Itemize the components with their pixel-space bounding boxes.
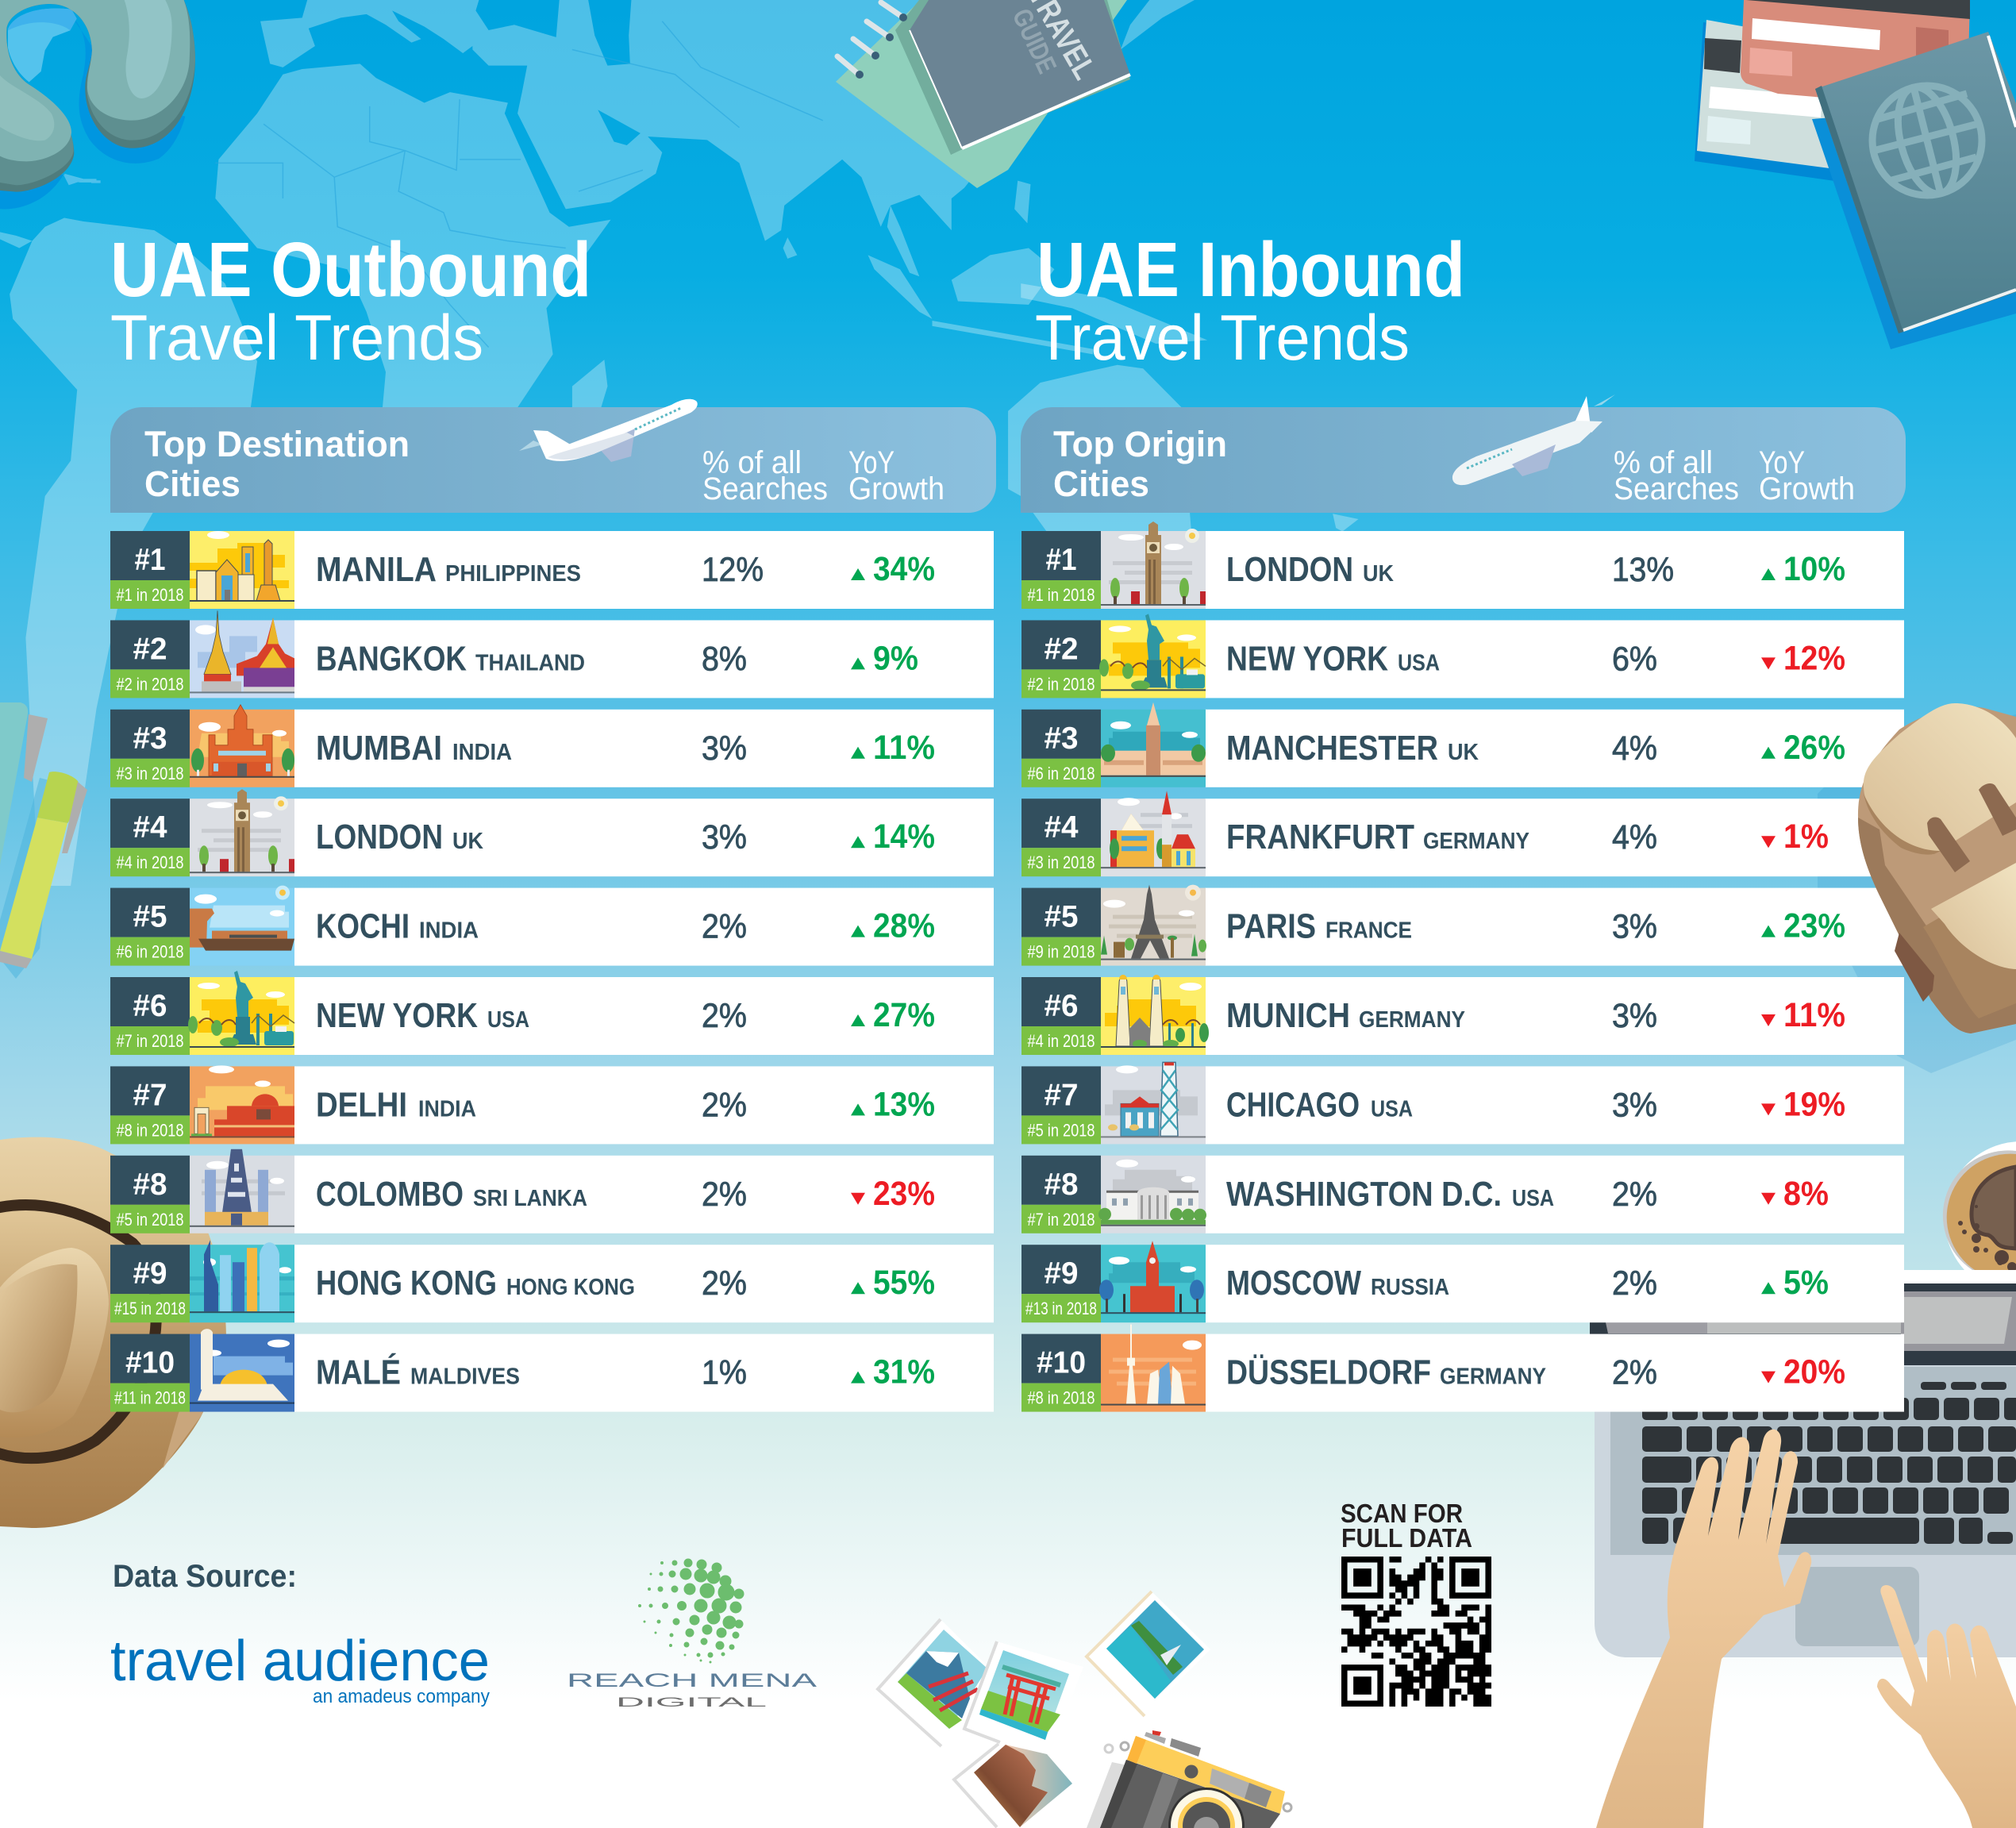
row: inbound 10 Dusseldorf: 2% — [1612, 1354, 1657, 1392]
row: inbound 2 New York: #2 — [1045, 632, 1078, 666]
row: inbound 10 Dusseldorf: GERMANY — [1440, 1364, 1546, 1390]
row: inbound 2 New York: USA — [1398, 650, 1440, 675]
panel: outbound table header: Searches — [702, 471, 828, 506]
row: outbound 1 Manila: 12% — [702, 551, 764, 589]
row: outbound 6 New York: #6 — [133, 989, 167, 1023]
callout: scan for full data: SCAN FOR — [1341, 1499, 1463, 1528]
row: outbound 8 Colombo: #5 in 2018 — [116, 1210, 184, 1230]
row: outbound 10 Male: MALDIVES — [410, 1364, 520, 1390]
row: outbound 7 Delhi: #8 in 2018 — [116, 1120, 184, 1140]
row: outbound 3 Mumbai: INDIA — [452, 740, 512, 765]
row: outbound 3 Mumbai — [110, 705, 994, 787]
icon: passport — [1812, 32, 2016, 349]
row: outbound 7 Delhi: 13% — [873, 1085, 935, 1123]
row: outbound 8 Colombo: 23% — [873, 1175, 935, 1213]
row: inbound 9 Moscow: MOSCOW — [1226, 1264, 1362, 1303]
callout: scan for full data: FULL DATA — [1341, 1523, 1472, 1553]
row: outbound 6 New York: USA — [487, 1007, 529, 1033]
icon: Mumbai skyline — [190, 705, 294, 787]
row: outbound 6 New York — [110, 971, 994, 1055]
icon: New York skyline — [1099, 614, 1206, 698]
row: outbound 9 Hong Kong: HONG KONG — [506, 1275, 635, 1300]
subtitle: Travel Trends: Travel Trends — [110, 302, 483, 374]
row: outbound 2 Bangkok: 9% — [873, 639, 918, 677]
icon: Dusseldorf skyline — [1101, 1325, 1206, 1412]
table: outbound rows — [110, 531, 994, 1412]
photo: mountain — [878, 1619, 1004, 1746]
row: inbound 6 Munich — [1021, 975, 1904, 1055]
callout: scan for full data — [1341, 1499, 1472, 1553]
icon: Munich skyline — [1101, 975, 1209, 1055]
row: outbound 3 Mumbai: #3 — [133, 722, 167, 756]
panel: outbound table header: Top Destination — [144, 424, 410, 464]
icon: credit cards — [1695, 0, 1970, 184]
row: inbound 6 Munich: GERMANY — [1359, 1007, 1465, 1033]
icon: Frankfurt skyline — [1101, 791, 1206, 876]
row: outbound 6 New York: 27% — [873, 996, 935, 1034]
row: inbound 3 Manchester — [1021, 702, 1904, 787]
map country borders — [215, 21, 823, 347]
panel: inbound table header: Cities — [1053, 464, 1149, 504]
row: inbound 2 New York — [1021, 614, 1904, 698]
subtitle: Travel Trends: Travel Trends — [1035, 302, 1410, 374]
row: inbound 1 London: #1 in 2018 — [1027, 585, 1095, 605]
row: outbound 2 Bangkok: #2 in 2018 — [116, 674, 184, 694]
row: inbound 6 Munich: #6 — [1045, 989, 1078, 1023]
row: inbound 10 Dusseldorf: #10 — [1037, 1346, 1086, 1380]
row: inbound 3 Manchester: #3 — [1045, 722, 1078, 756]
row: inbound 1 London: LONDON — [1226, 551, 1353, 589]
icon: Colombo skyline — [190, 1149, 294, 1233]
row: outbound 3 Mumbai: #3 in 2018 — [116, 764, 184, 783]
icon: camera — [1087, 1730, 1291, 1828]
icon: right hand — [1877, 1585, 2016, 1828]
row: inbound 1 London: #1 — [1046, 543, 1076, 577]
row: outbound 8 Colombo: #8 — [133, 1168, 167, 1202]
panel: inbound table header: Top Origin — [1053, 424, 1227, 464]
row: inbound 10 Dusseldorf: DÜSSELDORF — [1226, 1353, 1431, 1392]
row: inbound 6 Munich: #4 in 2018 — [1027, 1031, 1095, 1051]
panel: outbound table header — [110, 407, 996, 513]
row: inbound 6 Munich: MUNICH — [1226, 997, 1350, 1035]
row: outbound 8 Colombo: SRI LANKA — [473, 1186, 587, 1211]
row: outbound 9 Hong Kong: 55% — [873, 1264, 935, 1302]
logo: Reach Mena Digital: DIGITAL — [616, 1695, 767, 1710]
QR code — [1341, 1557, 1491, 1707]
row: outbound 10 Male: #10 — [125, 1346, 175, 1380]
row: inbound 5 Paris: #5 — [1045, 900, 1078, 934]
row: inbound 8 Washington: #8 — [1045, 1168, 1078, 1202]
icon: Moscow skyline — [1099, 1241, 1206, 1322]
icon: Kochi skyline — [190, 886, 294, 966]
panel: outbound table header: YoY — [848, 445, 895, 480]
row: outbound 10 Male: #11 in 2018 — [114, 1388, 186, 1408]
row: inbound 6 Munich: 3% — [1612, 997, 1657, 1035]
row: inbound 3 Manchester: MANCHESTER — [1226, 729, 1438, 768]
row: inbound 10 Dusseldorf — [1021, 1325, 1904, 1412]
row: outbound 2 Bangkok — [110, 610, 994, 698]
row: outbound 8 Colombo — [110, 1149, 994, 1233]
row: inbound 4 Frankfurt: #3 in 2018 — [1027, 852, 1095, 872]
row: inbound 9 Moscow: 2% — [1612, 1264, 1657, 1303]
row: inbound 1 London: 10% — [1783, 550, 1845, 588]
row: outbound 7 Delhi: #7 — [133, 1078, 167, 1112]
icon: Washington skyline — [1098, 1156, 1206, 1233]
row: outbound 6 New York: NEW YORK — [316, 997, 478, 1035]
row: inbound 3 Manchester: #6 in 2018 — [1027, 764, 1095, 783]
row: outbound 1 Manila: #1 — [135, 543, 165, 577]
icon: Paris skyline — [1101, 885, 1206, 966]
icon: travel guide notebook — [836, 0, 1130, 188]
icon: highlighter pens — [0, 702, 87, 979]
row: outbound 1 Manila: #1 in 2018 — [116, 585, 184, 605]
row: inbound 4 Frankfurt: 4% — [1612, 818, 1657, 856]
row: inbound 7 Chicago — [1021, 1062, 1904, 1144]
panel: inbound table header: Growth — [1759, 471, 1855, 506]
row: inbound 1 London — [1021, 521, 1904, 609]
row: outbound 10 Male — [110, 1329, 994, 1412]
row: outbound 1 Manila: PHILIPPINES — [445, 561, 581, 587]
row: outbound 4 London: LONDON — [316, 818, 443, 856]
row: inbound 5 Paris — [1021, 885, 1904, 966]
row: inbound 3 Manchester: 26% — [1783, 729, 1845, 767]
panel: inbound table header: Searches — [1614, 471, 1739, 506]
row: outbound 8 Colombo: COLOMBO — [316, 1176, 464, 1214]
row: inbound 8 Washington: USA — [1512, 1186, 1554, 1211]
row: inbound 4 Frankfurt: GERMANY — [1423, 829, 1529, 854]
icon: London skyline — [190, 789, 294, 876]
row: outbound 9 Hong Kong — [110, 1240, 994, 1322]
row: inbound 3 Manchester: 4% — [1612, 729, 1657, 768]
row: inbound 2 New York: #2 in 2018 — [1027, 674, 1095, 694]
row: inbound 1 London: UK — [1363, 561, 1394, 587]
row: inbound 5 Paris: FRANCE — [1325, 918, 1412, 944]
panel: inbound table header: % of all — [1614, 445, 1713, 480]
row: inbound 5 Paris: 3% — [1612, 908, 1657, 946]
row: outbound 7 Delhi: INDIA — [418, 1096, 476, 1122]
row: outbound 2 Bangkok: THAILAND — [475, 650, 585, 675]
row: inbound 7 Chicago: #5 in 2018 — [1027, 1120, 1095, 1140]
panel: UAE inbound heading — [1035, 226, 1465, 374]
icon: backpack — [1858, 703, 2016, 1033]
row: outbound 1 Manila: 34% — [873, 550, 935, 588]
icon: photo prints — [878, 1591, 1210, 1827]
row: inbound 10 Dusseldorf: #8 in 2018 — [1027, 1388, 1095, 1408]
row: outbound 5 Kochi: #5 — [133, 900, 167, 934]
row: inbound 4 Frankfurt: #4 — [1045, 810, 1079, 845]
data source label: Data Source: — [113, 1559, 297, 1594]
panel: inbound table header — [1021, 407, 1906, 513]
icon: Hong Kong skyline — [190, 1240, 294, 1322]
row: outbound 9 Hong Kong: #9 — [133, 1257, 167, 1291]
world map background — [0, 0, 1359, 886]
row: outbound 3 Mumbai: 3% — [702, 729, 747, 768]
panel: outbound table header: % of all — [702, 445, 802, 480]
photo: tropical island — [1087, 1591, 1210, 1716]
row: inbound 7 Chicago: #7 — [1045, 1078, 1078, 1112]
row: inbound 8 Washington: WASHINGTON D.C. — [1226, 1176, 1502, 1214]
logo: Reach Mena Digital — [567, 1559, 817, 1710]
icon: Chicago skyline — [1101, 1062, 1206, 1144]
panel: inbound table header: YoY — [1759, 445, 1805, 480]
row: inbound 4 Frankfurt: 1% — [1783, 818, 1829, 856]
row: outbound 4 London: #4 in 2018 — [116, 852, 184, 872]
row: outbound 3 Mumbai: 11% — [873, 729, 935, 767]
table: inbound rows — [1021, 521, 1904, 1412]
row: outbound 6 New York: #7 in 2018 — [116, 1031, 184, 1051]
row: outbound 7 Delhi: DELHI — [316, 1086, 407, 1124]
icon: London skyline — [1101, 521, 1206, 609]
row: inbound 7 Chicago: 19% — [1783, 1085, 1845, 1123]
row: outbound 5 Kochi: INDIA — [419, 918, 479, 944]
row: outbound 4 London: #4 — [133, 810, 167, 845]
icon: New York skyline — [188, 971, 294, 1055]
row: outbound 9 Hong Kong: 2% — [702, 1264, 747, 1303]
row: outbound 8 Colombo: 2% — [702, 1176, 747, 1214]
row: outbound 6 New York: 2% — [702, 997, 747, 1035]
row: inbound 2 New York: 6% — [1612, 640, 1657, 678]
row: inbound 8 Washington: #7 in 2018 — [1027, 1210, 1095, 1230]
icon: Male skyline — [190, 1329, 294, 1412]
icon: travel guide notebook: GUIDE — [1006, 4, 1062, 78]
row: outbound 9 Hong Kong: HONG KONG — [316, 1264, 497, 1303]
title: UAE Outbound: UAE Outbound — [110, 226, 591, 313]
photo: torii gate — [964, 1641, 1083, 1758]
panel: UAE outbound heading — [110, 226, 591, 374]
row: outbound 7 Delhi — [110, 1065, 994, 1144]
row: outbound 5 Kochi — [110, 886, 994, 966]
row: inbound 1 London: 13% — [1612, 551, 1674, 589]
row: inbound 9 Moscow: #13 in 2018 — [1025, 1299, 1097, 1318]
row: inbound 9 Moscow — [1021, 1241, 1904, 1322]
row: inbound 5 Paris: #9 in 2018 — [1027, 942, 1095, 962]
panel: outbound table header: Growth — [848, 471, 945, 506]
row: outbound 1 Manila — [110, 531, 994, 609]
row: outbound 2 Bangkok: #2 — [133, 632, 167, 666]
row: inbound 6 Munich: 11% — [1783, 996, 1845, 1034]
row: outbound 2 Bangkok: 8% — [702, 640, 747, 678]
icon: airplane outbound — [519, 399, 698, 462]
row: outbound 5 Kochi: KOCHI — [316, 908, 410, 946]
row: inbound 3 Manchester: UK — [1448, 740, 1479, 765]
row: outbound 4 London: UK — [452, 829, 483, 854]
icon: Manila skyline — [190, 531, 294, 609]
row: outbound 10 Male: 1% — [702, 1354, 747, 1392]
row: inbound 4 Frankfurt — [1021, 791, 1904, 876]
row: outbound 4 London — [110, 789, 994, 876]
row: inbound 9 Moscow: RUSSIA — [1371, 1275, 1449, 1300]
row: outbound 1 Manila: MANILA — [316, 551, 437, 589]
row: inbound 10 Dusseldorf: 20% — [1783, 1353, 1845, 1391]
icon: neck pillow — [0, 0, 195, 209]
row: outbound 5 Kochi: #6 in 2018 — [116, 942, 184, 962]
logo: travel audience: travel audience — [110, 1630, 490, 1693]
icon: Bangkok skyline — [190, 610, 294, 698]
icon: Delhi skyline — [190, 1065, 294, 1144]
row: outbound 5 Kochi: 28% — [873, 907, 935, 945]
panel: outbound table header: Cities — [144, 464, 240, 504]
row: outbound 7 Delhi: 2% — [702, 1086, 747, 1124]
icon: airplane inbound — [1452, 394, 1615, 485]
row: outbound 2 Bangkok: BANGKOK — [316, 640, 467, 678]
icon: left hand — [1596, 1430, 1811, 1828]
row: inbound 5 Paris: PARIS — [1226, 908, 1316, 946]
row: outbound 4 London: 14% — [873, 818, 935, 856]
row: inbound 7 Chicago: USA — [1371, 1096, 1413, 1122]
icon: laptop — [1590, 1270, 2016, 1657]
logo: travel audience: an amadeus company — [313, 1686, 490, 1707]
row: inbound 2 New York: 12% — [1783, 639, 1845, 677]
title: UAE Inbound: UAE Inbound — [1037, 226, 1465, 313]
photo: desert canyon — [954, 1744, 1079, 1827]
row: inbound 7 Chicago: 3% — [1612, 1086, 1657, 1124]
row: outbound 9 Hong Kong: #15 in 2018 — [114, 1299, 186, 1318]
icon: dotted globe — [638, 1559, 744, 1663]
row: outbound 3 Mumbai: MUMBAI — [316, 729, 442, 768]
row: inbound 7 Chicago: CHICAGO — [1226, 1086, 1360, 1124]
row: inbound 4 Frankfurt: FRANKFURT — [1226, 818, 1414, 856]
icon: Manchester skyline — [1101, 702, 1206, 787]
row: outbound 10 Male: MALÉ — [316, 1353, 401, 1392]
logo: Reach Mena Digital: REACH MENA — [567, 1670, 817, 1691]
row: inbound 9 Moscow: 5% — [1783, 1264, 1829, 1302]
row: outbound 4 London: 3% — [702, 818, 747, 856]
icon: coffee cup — [1943, 1141, 2016, 1272]
row: inbound 5 Paris: 23% — [1783, 907, 1845, 945]
row: outbound 5 Kochi: 2% — [702, 908, 747, 946]
row: inbound 8 Washington: 2% — [1612, 1176, 1657, 1214]
icon: backpack shadow — [1818, 714, 2016, 1073]
row: inbound 2 New York: NEW YORK — [1226, 640, 1388, 678]
row: outbound 10 Male: 31% — [873, 1353, 935, 1391]
icon: straw hat — [0, 1137, 226, 1528]
row: inbound 8 Washington — [1021, 1156, 1904, 1233]
row: inbound 8 Washington: 8% — [1783, 1175, 1829, 1213]
row: inbound 9 Moscow: #9 — [1045, 1257, 1078, 1291]
